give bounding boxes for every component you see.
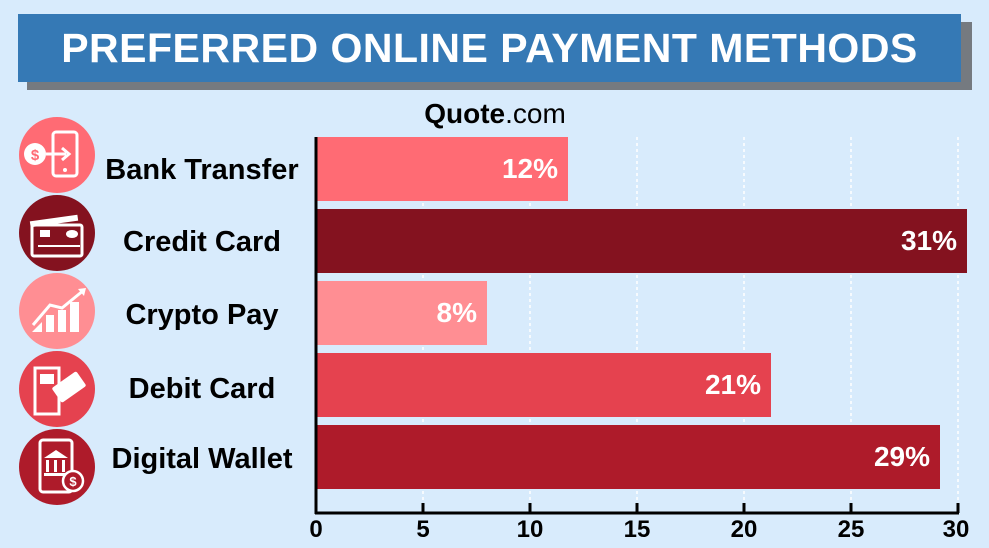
axes: [314, 137, 960, 514]
title banner: PREFERRED ONLINE PAYMENT METHODS: [61, 25, 918, 71]
category labels: [105, 154, 299, 475]
icons: [19, 117, 95, 505]
x-axis tick labels: 5: [416, 516, 430, 543]
x-axis tick labels: 0: [309, 516, 323, 543]
x-axis tick labels: 15: [624, 516, 650, 543]
category labels: Debit Card: [129, 373, 275, 405]
category labels: Crypto Pay: [125, 299, 279, 331]
category labels: Credit Card: [123, 226, 281, 258]
x-axis tick labels: 25: [838, 516, 864, 543]
bar: Debit Card: 21%: [705, 369, 761, 400]
bar: Credit Card: [316, 209, 967, 273]
bar: Crypto Pay: [316, 281, 487, 345]
x-axis tick labels: 20: [731, 516, 757, 543]
icon: bank transfer: [19, 117, 95, 193]
icon: digital wallet: $: [69, 474, 77, 489]
bar: Digital Wallet: 29%: [874, 441, 930, 472]
chart: [314, 137, 967, 514]
bar: Debit Card: [316, 353, 771, 417]
bar: Crypto Pay: 8%: [437, 297, 477, 328]
category labels: Digital Wallet: [112, 443, 292, 475]
bar: Digital Wallet: [316, 425, 940, 489]
x-axis tick labels: 10: [517, 516, 543, 543]
category labels: Bank Transfer: [105, 154, 299, 186]
brand logo: Quote.com: [424, 98, 566, 129]
bar: Bank Transfer: 12%: [502, 153, 558, 184]
bar: Credit Card: 31%: [901, 225, 957, 256]
x-axis tick labels: 30: [943, 516, 969, 543]
title banner: [18, 14, 972, 90]
icon: debit card: [19, 351, 95, 427]
bar: Bank Transfer: [316, 137, 568, 201]
icon: crypto pay: [19, 273, 95, 349]
icon: bank transfer: $: [31, 147, 40, 164]
icon: credit card: [19, 195, 95, 271]
icon: digital wallet: [19, 429, 95, 505]
